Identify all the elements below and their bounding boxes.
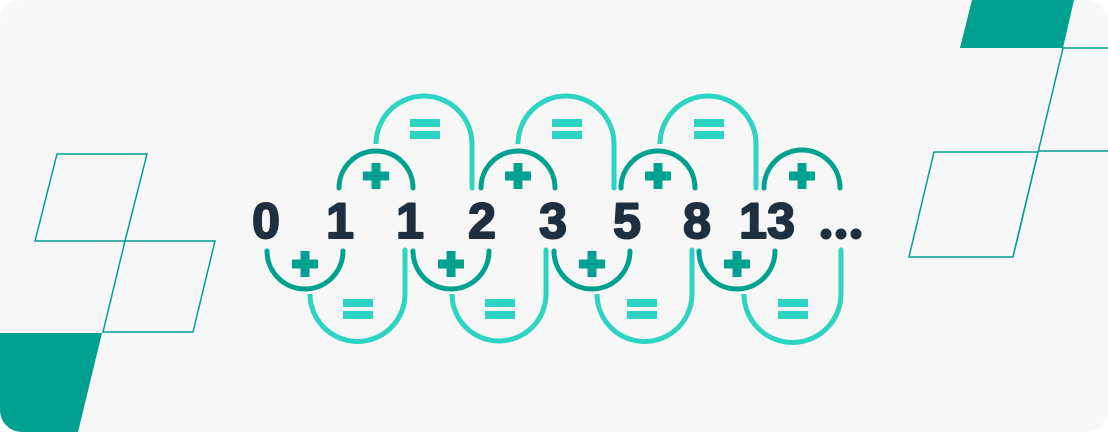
sequence numbers: 0 xyxy=(252,193,280,249)
fibonacci diagram xyxy=(267,96,841,342)
bottom equals arcs xyxy=(310,250,841,342)
sequence numbers: 1 xyxy=(396,193,424,249)
bottom plus arcs xyxy=(267,251,775,289)
sequence numbers xyxy=(252,193,795,249)
sequence numbers: 3 xyxy=(767,193,795,249)
top plus arcs xyxy=(339,150,840,188)
decoration: left shapes xyxy=(0,154,215,432)
sequence numbers: 3 xyxy=(539,193,567,249)
ellipsis xyxy=(820,228,862,240)
equals icons xyxy=(343,119,808,319)
plus icons xyxy=(292,163,815,277)
sequence numbers: 5 xyxy=(613,193,641,249)
sequence numbers: 1 xyxy=(326,193,354,249)
sequence numbers: 1 xyxy=(739,193,767,249)
top equals arcs xyxy=(376,96,756,188)
decoration: right shapes xyxy=(909,0,1108,257)
sequence numbers: 2 xyxy=(468,193,496,249)
sequence numbers: 8 xyxy=(683,193,711,249)
